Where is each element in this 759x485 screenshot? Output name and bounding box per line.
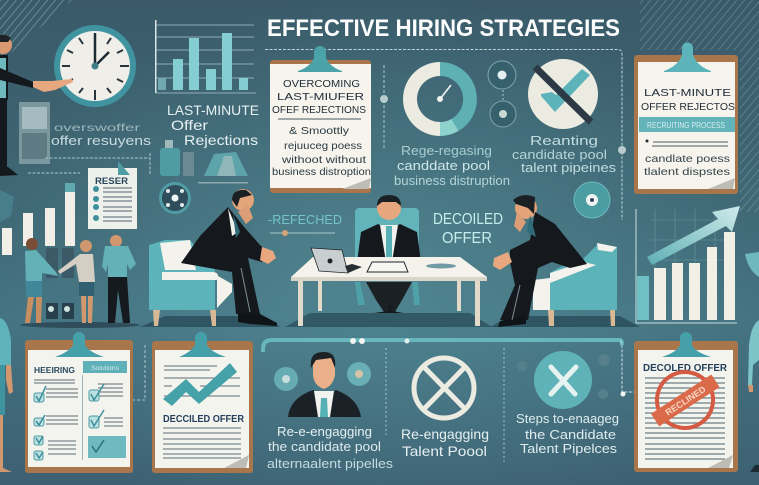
icon: circled X [414, 358, 474, 418]
icon: candidate bust [274, 352, 371, 417]
icons: two gear dials [488, 61, 516, 127]
text block: re-engaging talent pool: Re-engagging [401, 426, 489, 442]
icon: crossed-out check [528, 59, 598, 129]
text block: last-minute offer rejections: Offer [171, 117, 208, 133]
panel: declined offer clipboard with stamp [634, 332, 738, 472]
text block: steps to engage: Talent Pipelces [520, 441, 618, 456]
text block: re-engaging the candidate pool: the candidate pool [268, 439, 381, 454]
panel: declined offer clipboard with stamp: DECOLED OFFER [643, 363, 728, 374]
icon: office items [160, 140, 248, 184]
text block: re-engaging talent pool: Talent Poool [402, 443, 487, 459]
text block: reanting candidate pool: Reanting [530, 133, 598, 148]
bar chart: top left [155, 20, 256, 93]
icon: resume sheet: RESER [95, 176, 129, 186]
icon: clip [55, 332, 104, 357]
label: refeched [268, 212, 342, 236]
text block: reanting candidate pool: talent pipeines [521, 160, 617, 175]
icon: plant left [0, 190, 14, 222]
figures: three people shaking hands [20, 235, 140, 328]
label: decoiled offer: OFFER [442, 230, 492, 247]
text block: re-engaging candidate pool: Rege-regasing [401, 143, 492, 158]
text block: steps to engage: Steps to-enaageg [516, 411, 619, 426]
text block: last-minute offer rejections: LAST-MINUTE [167, 102, 259, 118]
title: EFFECTIVE HIRING STRATEGIES [267, 15, 620, 42]
text block: steps to engage: the Candidate [525, 427, 616, 442]
bar chart: bottom left [2, 183, 75, 255]
text block: last-minute offer rejections [167, 102, 259, 148]
figure: central man at desk [355, 195, 421, 318]
text block: re-engaging candidate pool: business distruption [394, 173, 510, 188]
panel: left clipboard overcoming rejections: withoot without [281, 154, 366, 166]
table with laptop [291, 248, 487, 326]
panel: left clipboard overcoming rejections: OVERCOMING [283, 78, 360, 90]
icon: plant right [745, 252, 759, 277]
label: decoiled offer [433, 211, 503, 247]
icon: wall clock [54, 25, 136, 107]
chart: growth bars with arrow [636, 206, 740, 323]
icon: clip [179, 332, 226, 357]
text block: re-engaging candidate pool [394, 143, 510, 188]
panel: right clipboard last-minute offer rejections: OFFER REJECTOS [641, 101, 735, 113]
text block: re-engaging candidate pool: canddate pool [397, 158, 490, 173]
floor shadow under table [285, 313, 492, 327]
icon: declined stamp: RECLINED [664, 384, 708, 418]
left woman [0, 318, 13, 472]
text block: re-engaging talent pool [401, 426, 489, 459]
icon: teal X circle [517, 351, 610, 409]
panel: hiring checklist clipboard: HEEIRING [34, 366, 75, 375]
text block: reanting candidate pool [512, 133, 617, 175]
panel: left clipboard overcoming rejections: rejuuceg poess [284, 140, 362, 152]
text block: re-engaging the candidate pool: Re-e-engagging [277, 424, 372, 439]
figure: left hunched man [181, 189, 277, 326]
icon: resume sheet [88, 161, 137, 229]
panel: left clipboard overcoming rejections: & Smoottly [289, 125, 350, 137]
icon: clip [298, 46, 342, 72]
panel: declined offer clipboard: DECCILED OFFER [163, 413, 244, 425]
text block: offer resumes: overswoffer [54, 123, 141, 134]
label: decoiled offer: DECOILED [433, 211, 503, 228]
panel: left clipboard overcoming rejections: OFEF REJECTIONS [272, 104, 366, 116]
icon: teal flower dial [574, 182, 610, 218]
panel: left clipboard overcoming rejections [270, 46, 371, 193]
figure: right chair [533, 243, 617, 326]
figure: right hunched man [493, 195, 587, 327]
icon: laptop [311, 248, 362, 273]
text block: reanting candidate pool: candidate pool [512, 147, 607, 162]
label: refeched: -REFECHED [268, 212, 342, 227]
floor shadows under chairs [140, 316, 640, 327]
panel: left clipboard overcoming rejections: LAST-MIUFER [277, 91, 365, 103]
figure: left chair [149, 240, 232, 326]
panel: right clipboard last-minute offer rejections: RECRUITING PROCESS [647, 121, 725, 130]
text block: steps to engage [516, 411, 619, 456]
text block: offer resumes: offer resuyens [51, 133, 152, 148]
icon: network circle [160, 184, 190, 212]
text block: offer resumes [51, 123, 152, 148]
chart: gauge donut [403, 62, 477, 136]
icon: clip [664, 42, 711, 72]
text block: re-engaging the candidate pool [267, 424, 394, 471]
panel: right clipboard last-minute offer rejections: tlalent dispstes [644, 166, 730, 178]
panel: left clipboard overcoming rejections: business distroption [272, 166, 371, 178]
text block: re-engaging the candidate pool: alternaalent pipelles [267, 456, 394, 471]
panel: right clipboard last-minute offer rejections: candlate poess [645, 153, 730, 165]
panel: hiring checklist clipboard [25, 332, 133, 473]
teal divider band [263, 340, 622, 352]
icon: clip [662, 332, 711, 357]
panel: hiring checklist clipboard: Solutions [91, 366, 119, 372]
panel: right clipboard last-minute offer rejections: LAST-MINUTE [644, 87, 731, 99]
right woman [748, 320, 759, 472]
panel: right clipboard last-minute offer rejections [634, 42, 738, 194]
figure: presenter pointing at the clock [0, 35, 73, 176]
panel: declined offer clipboard [152, 332, 253, 473]
icon: faded document [19, 102, 50, 164]
text block: last-minute offer rejections: Rejections [184, 132, 258, 148]
